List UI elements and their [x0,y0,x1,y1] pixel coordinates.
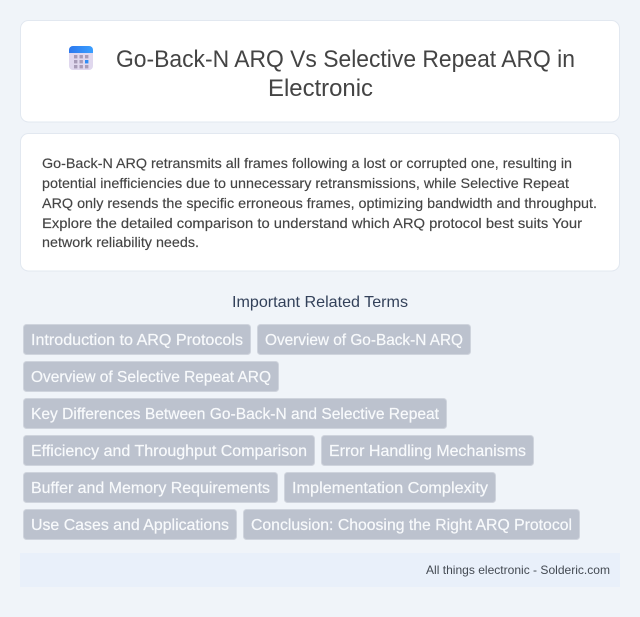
footer [20,553,620,587]
tag: key differences [24,398,446,428]
text block: description: ARQ only resends the specific erroneous frames, optimizing bandwidth and throughput. [42,195,597,211]
tag: go-back-n overview: Overview of Go-Back-N ARQ [265,332,463,349]
tag: use cases: Use Cases and Applications [31,517,229,534]
tag: introduction: Introduction to ARQ Protocols [31,332,243,349]
tag: introduction [24,324,250,354]
text block: description: Go-Back-N ARQ retransmits all frames following a lost or corrupted one, resulting in [42,155,572,171]
footer: All things electronic - Solderic.com [426,563,610,577]
tag: buffer [24,472,278,502]
tag: conclusion: Conclusion: Choosing the Right ARQ Protocol [251,517,572,534]
tag: selective repeat overview: Overview of Selective Repeat ARQ [31,369,271,386]
title [116,46,575,102]
text block: description: Explore the detailed comparison to understand which ARQ protocol best suits Your [42,215,582,231]
tag: buffer: Buffer and Memory Requirements [31,480,270,497]
panel: header [20,20,620,122]
tag: error handling [322,436,534,466]
tag: implementation: Implementation Complexity [292,480,488,497]
panel: description [20,134,620,271]
text block: description [42,155,597,250]
icon: calendar [69,46,93,70]
title: Go-Back-N ARQ Vs Selective Repeat ARQ in [116,46,575,73]
text block: description: potential inefficiencies due to unnecessary retransmissions, while Selective Repeat [42,175,569,191]
tag: conclusion [244,510,580,540]
tag: go-back-n overview [258,324,470,354]
tag: selective repeat overview [24,362,278,392]
text block: description: network reliability needs. [42,234,199,250]
tag: key differences: Key Differences Between Go-Back-N and Selective Repeat [31,406,440,423]
title: Electronic [268,75,373,102]
tag list [24,324,580,540]
tag: implementation [284,472,496,502]
tag: efficiency: Efficiency and Throughput Comparison [31,443,307,460]
tag: error handling: Error Handling Mechanisms [329,443,526,460]
tag: use cases [24,510,236,540]
heading: important related terms: Important Related Terms [232,294,408,311]
tag: efficiency [24,436,314,466]
